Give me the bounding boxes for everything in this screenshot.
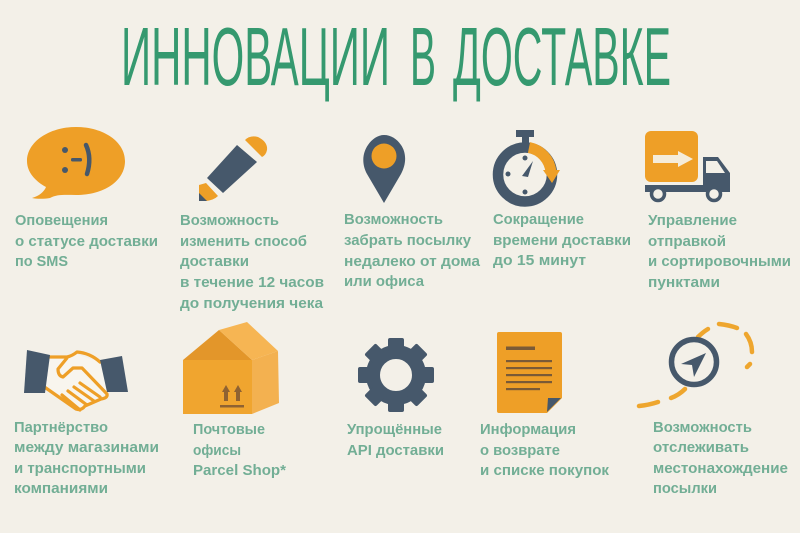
text: change delivery [180, 212, 324, 312]
icon: truck [645, 131, 730, 200]
icon: handshake [24, 350, 128, 410]
text: pickup near home: недалеко от дома [344, 253, 481, 270]
panel: SMS notifications [15, 127, 158, 270]
text: simplified API: API доставки [347, 442, 444, 459]
text: shorter delivery time [493, 211, 631, 269]
text: dispatch management: и сортировочными [648, 253, 791, 270]
text: dispatch management [648, 212, 791, 291]
panel: change delivery [180, 136, 324, 312]
text: simplified API [347, 421, 444, 459]
icon: pencil [199, 136, 267, 201]
text: change delivery: доставки [180, 253, 249, 270]
text: change delivery: Возможность [180, 212, 279, 229]
text: parcel shop: офисы [193, 442, 241, 459]
text: partnership: компаниями [14, 480, 108, 497]
text: parcel tracking: посылки [653, 480, 717, 497]
icon: map pin [363, 135, 405, 203]
text: shorter delivery time: Сокращение [493, 211, 584, 228]
icon: parcel box house [183, 322, 279, 414]
panel: dispatch management [645, 131, 791, 291]
panel: parcel tracking [639, 324, 788, 497]
text: SMS notifications: о статусе доставки [15, 233, 158, 250]
text: pickup near home: Возможность [344, 211, 443, 228]
text: dispatch management: отправкой [648, 233, 726, 250]
panel: parcel shop [183, 322, 286, 479]
panel: pickup near home [344, 135, 481, 290]
icon: stopwatch [498, 130, 560, 202]
text: SMS notifications: по SMS [15, 253, 68, 270]
text: partnership: Партнёрство [14, 419, 108, 436]
text: pickup near home [344, 211, 481, 290]
text: parcel shop: Почтовые [193, 421, 265, 438]
text: SMS notifications [15, 212, 158, 270]
text: simplified API: Упрощённые [347, 421, 442, 438]
text: parcel tracking: местонахождение [653, 460, 788, 477]
text: change delivery: в течение 12 часов [180, 274, 324, 291]
title: ИННОВАЦИИ [121, 10, 390, 103]
text: change delivery: до получения чека [180, 295, 324, 312]
text: parcel tracking: Возможность [653, 419, 752, 436]
text: partnership: между магазинами [14, 439, 159, 456]
text: SMS notifications: Оповещения [15, 212, 108, 229]
text: parcel shop [193, 421, 286, 479]
text: dispatch management: пунктами [648, 274, 720, 291]
text: return information: Информация [480, 421, 576, 438]
icon: gear [358, 338, 434, 412]
text: change delivery: изменить способ [180, 233, 307, 250]
text: shorter delivery time: до 15 минут [493, 252, 586, 269]
text: parcel tracking [653, 419, 788, 497]
text: dispatch management: Управление [648, 212, 737, 229]
panel: return information [480, 332, 609, 479]
text: return information: о возврате [480, 442, 560, 459]
text: shorter delivery time: времени доставки [493, 232, 631, 249]
text: return information: и списке покупок [480, 462, 609, 479]
panel: shorter delivery time [493, 130, 631, 269]
panel: simplified API [347, 338, 444, 459]
panel: partnership [14, 350, 159, 497]
text: partnership: и транспортными [14, 460, 146, 477]
text: parcel shop: Parcel Shop* [193, 462, 286, 479]
text: parcel tracking: отслеживать [653, 439, 749, 456]
text: pickup near home: или офиса [344, 273, 425, 290]
text: return information [480, 421, 609, 479]
title: В [410, 10, 436, 103]
icon: document [497, 332, 562, 413]
icon: compass with dashed route [639, 324, 752, 406]
icon: speech bubble [27, 127, 125, 199]
text: partnership [14, 419, 159, 497]
text: pickup near home: забрать посылку [344, 232, 472, 249]
